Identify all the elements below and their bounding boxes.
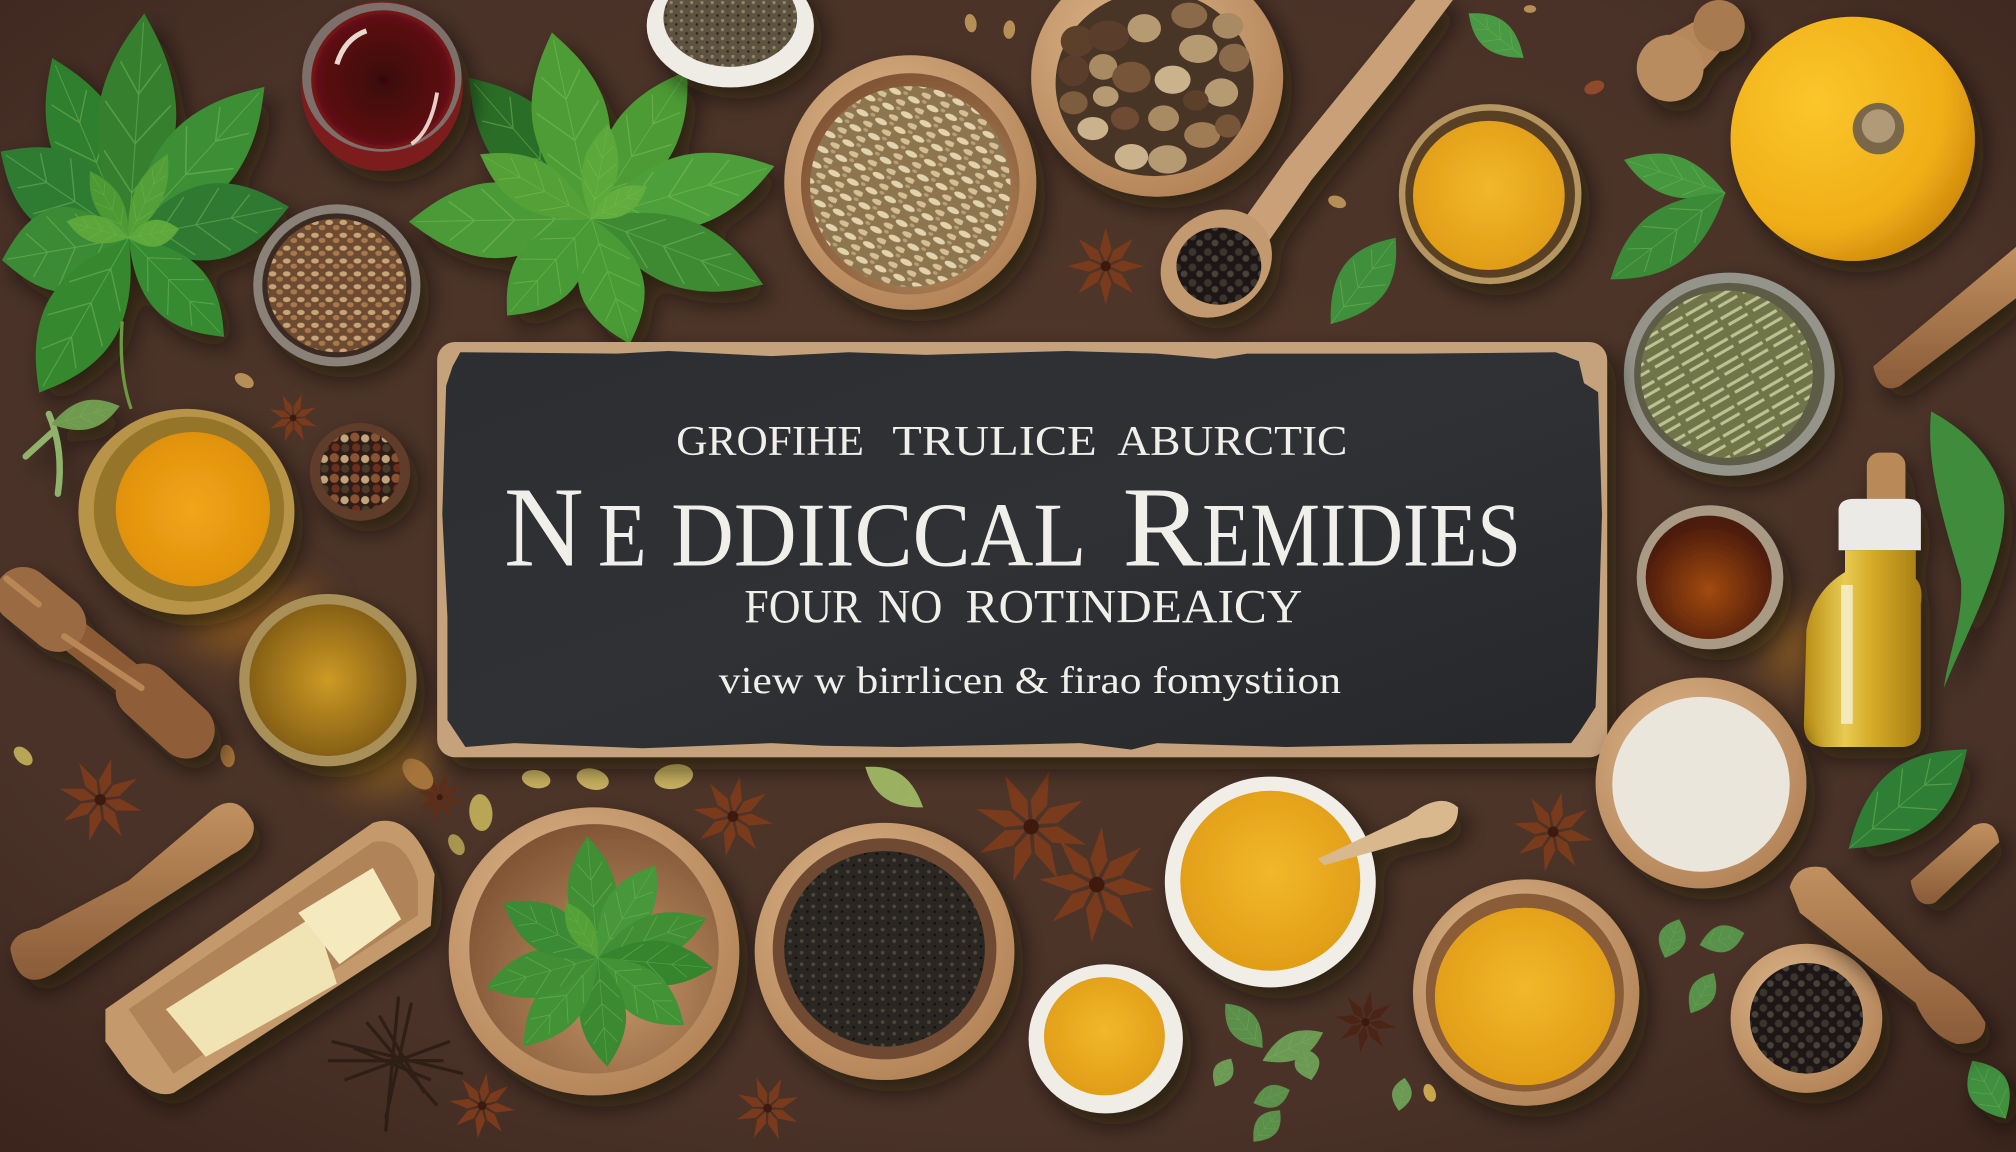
heading: top line: GROFIHE	[676, 418, 864, 465]
wooden bowl: black tea	[755, 823, 1014, 1080]
red syrup glass	[301, 1, 463, 171]
small bowl: peppercorns	[1731, 944, 1882, 1093]
title: E	[598, 485, 647, 586]
honey glass	[78, 409, 294, 615]
pestle: lower right	[1790, 823, 1999, 1044]
title: R	[1122, 464, 1203, 591]
leaf below board	[857, 755, 931, 819]
title: EMIDIES	[1202, 485, 1521, 586]
dropper bottle	[1804, 453, 1922, 747]
footer line: view w birrlicen & firao fomystiion	[719, 660, 1341, 702]
lemon	[1731, 17, 1975, 261]
heading: top line: TRULICE	[892, 418, 1097, 465]
oil glass	[239, 594, 417, 766]
flour bowl	[1596, 678, 1806, 888]
star anise group	[48, 228, 1601, 1152]
wooden stick: right edge	[1873, 247, 2016, 388]
amber glass	[1637, 505, 1783, 649]
subtitle	[744, 581, 1302, 633]
subtitle: FOUR	[744, 581, 862, 633]
title: DDIICCAL	[671, 485, 1086, 586]
board frame	[437, 342, 1607, 757]
title	[504, 464, 1521, 591]
butter blocks	[166, 868, 401, 1057]
chalkboard panel	[437, 342, 1607, 757]
dried twig bunch	[328, 996, 463, 1131]
warm light reflections	[180, 579, 1826, 791]
heading: top line: ABURCTIC	[1117, 418, 1347, 465]
scattered seeds	[10, 5, 1606, 1104]
wooden bowl: seeds	[784, 55, 1036, 310]
pestle: lower left	[10, 803, 254, 980]
subtitle: NO	[878, 581, 942, 633]
green leaves: upper right	[1311, 1, 1742, 339]
wooden bowl: turmeric	[1413, 879, 1639, 1106]
wooden bowl: mint	[449, 807, 739, 1095]
small leaves: lower middle	[1207, 915, 1748, 1149]
board surface	[442, 351, 1602, 750]
white bowl: ground herbs	[647, 0, 814, 87]
wooden spoon with peppercorns	[1139, 0, 1453, 340]
white bowl: turmeric with spoon	[1165, 777, 1458, 987]
subtitle: ROTINDEAICY	[966, 581, 1302, 633]
herb glass: right	[1624, 273, 1835, 476]
pestle: left	[6, 579, 186, 730]
turmeric glass	[1399, 104, 1581, 284]
green leaves: right edge	[1828, 411, 2016, 1129]
white bowl: small turmeric	[1029, 964, 1183, 1113]
mint sprig: top centre	[408, 25, 784, 353]
pestle: top right	[1637, 0, 1745, 102]
title: N	[504, 464, 584, 591]
mint sprig: top left	[0, 11, 296, 494]
spice glass: left	[253, 204, 420, 366]
wooden bowl: nuts	[1031, 0, 1283, 197]
small bowl: mixed beans	[310, 423, 410, 521]
heading: top line	[676, 418, 1347, 465]
wooden board with butter	[105, 821, 435, 1094]
